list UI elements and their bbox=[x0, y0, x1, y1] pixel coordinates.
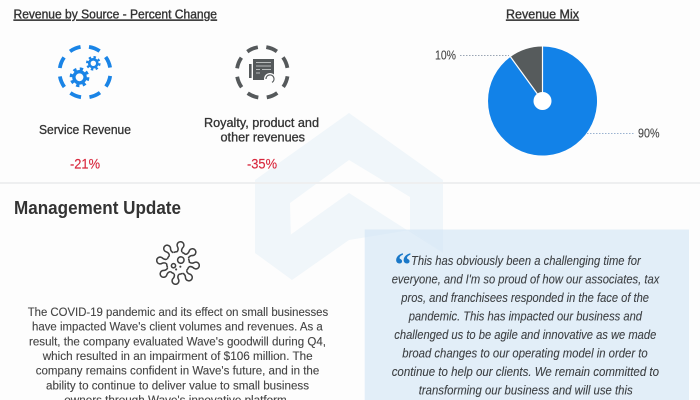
text block: management commentary: which resulted in an impairment of $106 million. The bbox=[42, 349, 313, 363]
text block: management commentary: result, the company evaluated Wave's goodwill during Q4, bbox=[29, 334, 326, 348]
label: royalty, product and other revenues: other revenues bbox=[220, 130, 305, 144]
icon: gears in dashed circle bbox=[60, 46, 110, 98]
text block: management commentary: company remains confident in Wave's future, and in the bbox=[36, 364, 319, 378]
icon: document in dashed circle bbox=[237, 47, 288, 98]
panel: service revenue bbox=[39, 46, 131, 172]
panel: quote bbox=[365, 230, 689, 400]
callout: 90 percent: 90% bbox=[638, 126, 660, 140]
text block: quote: broad changes to our operating model in order to bbox=[402, 346, 648, 360]
icon: quotation mark: “ bbox=[394, 247, 412, 284]
heading: revenue mix: Revenue Mix bbox=[506, 8, 580, 22]
text block: quote: pros, and franchisees responded in the face of the bbox=[400, 291, 649, 305]
text block: quote: continue to help our clients. We remain committed to bbox=[392, 365, 659, 379]
callout: 10 percent bbox=[435, 48, 509, 62]
callout: 10 percent: 10% bbox=[435, 48, 456, 62]
text block: management commentary: have impacted Wave's client volumes and revenues. As a bbox=[32, 320, 323, 334]
value: service revenue change: -21% bbox=[70, 156, 100, 172]
text block: management commentary bbox=[28, 305, 328, 400]
slice: 10 percent bbox=[510, 46, 542, 101]
label: royalty, product and other revenues: Royalty, product and bbox=[204, 116, 319, 130]
label: service revenue: Service Revenue bbox=[39, 123, 131, 137]
callout: 90 percent bbox=[587, 126, 660, 140]
text block: quote: transforming our business and will use this bbox=[419, 384, 633, 398]
value: royalty change: -35% bbox=[247, 156, 277, 172]
panel: royalty, product and other revenues bbox=[204, 47, 319, 172]
heading: revenue by source: Revenue by Source - Percent Change bbox=[14, 8, 217, 22]
pie chart: revenue mix bbox=[435, 46, 660, 156]
icon: virus bbox=[154, 239, 202, 287]
label: royalty, product and other revenues bbox=[204, 116, 319, 144]
text block: quote bbox=[392, 254, 660, 398]
text block: quote: pandemic. This has impacted our business and bbox=[408, 310, 643, 324]
heading: management update: Management Update bbox=[14, 197, 181, 218]
text block: management commentary: The COVID-19 pandemic and its effect on small businesses bbox=[28, 305, 328, 319]
section divider bbox=[0, 182, 700, 184]
text block: quote: This has obviously been a challenging time for bbox=[411, 254, 641, 268]
watermark logo bbox=[255, 113, 443, 280]
text block: quote: challenged us to be agile and innovative as we made bbox=[394, 328, 656, 342]
text block: quote: everyone, and I'm so proud of how our associates, tax bbox=[392, 272, 660, 286]
slice: 90 percent bbox=[488, 46, 597, 156]
text block: management commentary: ability to continue to deliver value to small business bbox=[46, 378, 309, 392]
